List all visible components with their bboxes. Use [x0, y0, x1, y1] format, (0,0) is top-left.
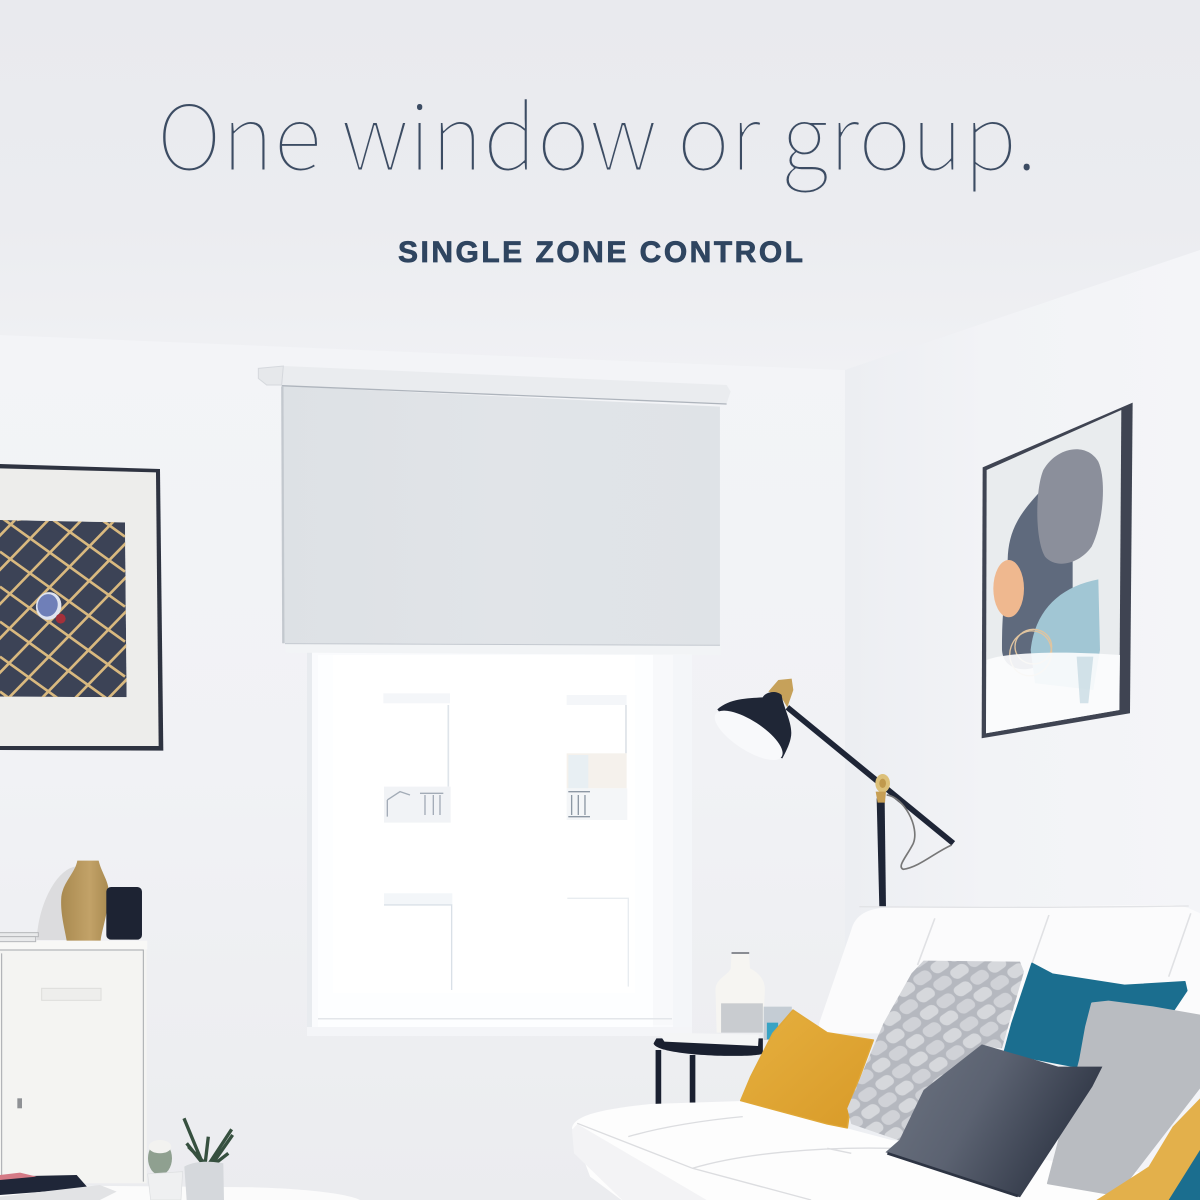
- lamp arm: [787, 707, 953, 843]
- right wall: [845, 250, 1200, 1200]
- pale blue shape: [1031, 579, 1100, 690]
- sofa back: [819, 905, 1200, 1033]
- right framed abstract picture: [982, 403, 1133, 738]
- blind bottom rail: [285, 643, 721, 655]
- cushion: teal corner: [1169, 1150, 1200, 1200]
- cabinet vent: [42, 988, 101, 1000]
- cushion: yellow right: [1096, 1098, 1200, 1200]
- stacked books: [0, 933, 38, 942]
- cactus in white pot: [148, 1140, 183, 1200]
- window: [307, 652, 692, 1036]
- white sofa with cushions: [572, 905, 1200, 1200]
- blind headrail: [282, 366, 731, 403]
- cabinet body: [0, 948, 147, 1183]
- sofa seat: [572, 1101, 1200, 1200]
- cushion: knitted grey: [847, 961, 1024, 1141]
- dark slate shape: [1002, 490, 1073, 669]
- books on table: [658, 1033, 759, 1046]
- floor lamp: [708, 679, 953, 907]
- cushion: yellow: [741, 1010, 873, 1128]
- blind fabric: [282, 386, 720, 645]
- brass lamp hinge: [768, 679, 793, 707]
- white ceramic vase: [715, 952, 765, 1033]
- lamp stand: [877, 798, 886, 907]
- left wall: [0, 335, 845, 1200]
- candle in glass: [764, 1007, 792, 1040]
- left framed picture: [0, 464, 164, 751]
- ceiling: [0, 0, 1200, 370]
- smart speaker: [106, 887, 142, 940]
- subtitle: SINGLE ZONE CONTROL: [398, 236, 803, 269]
- cabinet with decor: [0, 861, 360, 1200]
- cable: [887, 795, 952, 869]
- aloe in grey pot: [184, 1118, 233, 1200]
- peach circle: [993, 560, 1024, 617]
- lamp shade: [717, 692, 791, 758]
- hot air balloon motif: [33, 589, 66, 624]
- cushion: light grey: [1048, 1002, 1200, 1195]
- cushion: dark grey: [885, 1044, 1102, 1197]
- side table: [654, 952, 792, 1104]
- magazines: [0, 1173, 117, 1200]
- title: One window or group.: [157, 66, 1037, 196]
- lamp shade inner: [708, 702, 790, 769]
- building windows outside: [383, 693, 628, 990]
- lattice artwork: [0, 520, 126, 698]
- woven vase shadow: [37, 867, 75, 940]
- cabinet top: [0, 941, 147, 949]
- cabinet handle: [17, 1098, 22, 1108]
- white coffee table: [0, 1185, 360, 1200]
- cushion: teal: [1004, 963, 1187, 1070]
- woven vase: [61, 861, 109, 941]
- gold ring lines: [1003, 625, 1058, 682]
- glass reflection: [986, 653, 1120, 733]
- roller blind: [258, 366, 731, 655]
- grey oval shape: [1037, 449, 1103, 564]
- brass joint: [875, 774, 890, 803]
- wall bracket: [258, 366, 283, 385]
